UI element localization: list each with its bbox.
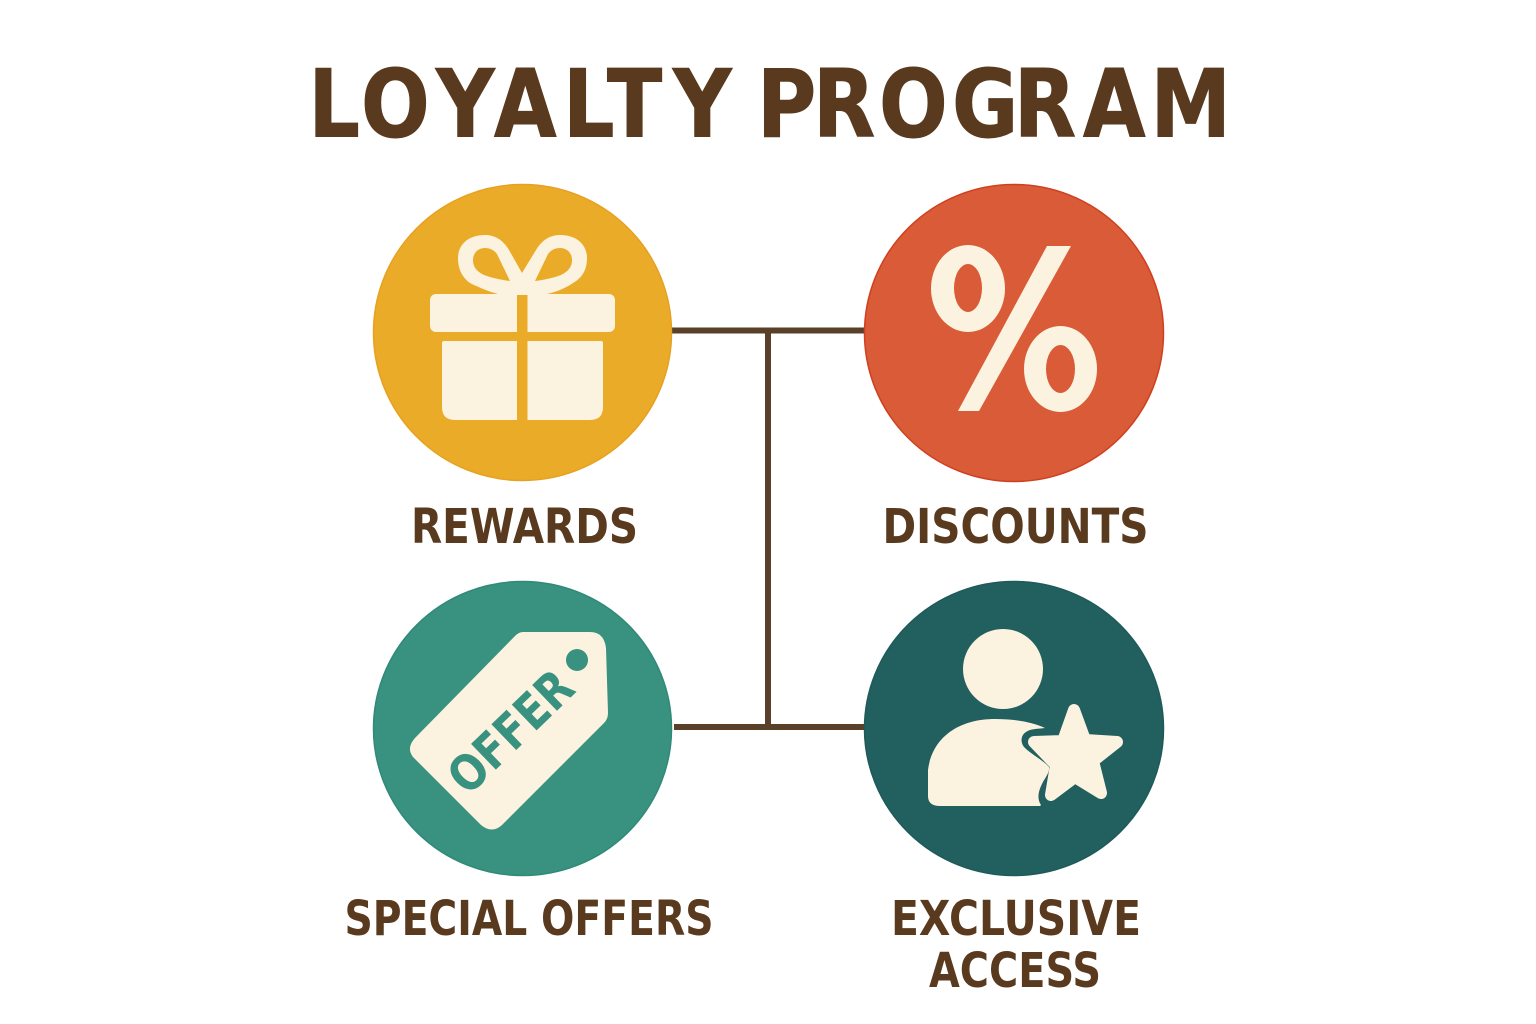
panel: rewards (374, 184, 672, 555)
icon: person with star (928, 629, 1117, 806)
label: rewards: REWARDS (411, 499, 638, 555)
exclusive access circle (864, 582, 1164, 876)
icon: percent (931, 245, 1097, 412)
label: special offers: SPECIAL OFFERS (344, 891, 714, 947)
rewards circle (374, 184, 672, 480)
panel: discounts (864, 184, 1164, 555)
label: exclusive access (891, 891, 1141, 999)
panel: exclusive access (864, 582, 1164, 999)
special offers circle (374, 582, 672, 876)
icon: gift (430, 235, 615, 422)
discounts circle (864, 184, 1164, 482)
icon: offer tag: OFFER (437, 659, 586, 805)
label: exclusive access: ACCESS (929, 943, 1101, 999)
label: discounts: DISCOUNTS (882, 499, 1148, 555)
label: exclusive access: EXCLUSIVE (891, 891, 1141, 947)
connector lines (670, 330, 866, 727)
title: LOYALTY PROGRAM (308, 50, 1231, 159)
panel: special offers (344, 582, 714, 947)
